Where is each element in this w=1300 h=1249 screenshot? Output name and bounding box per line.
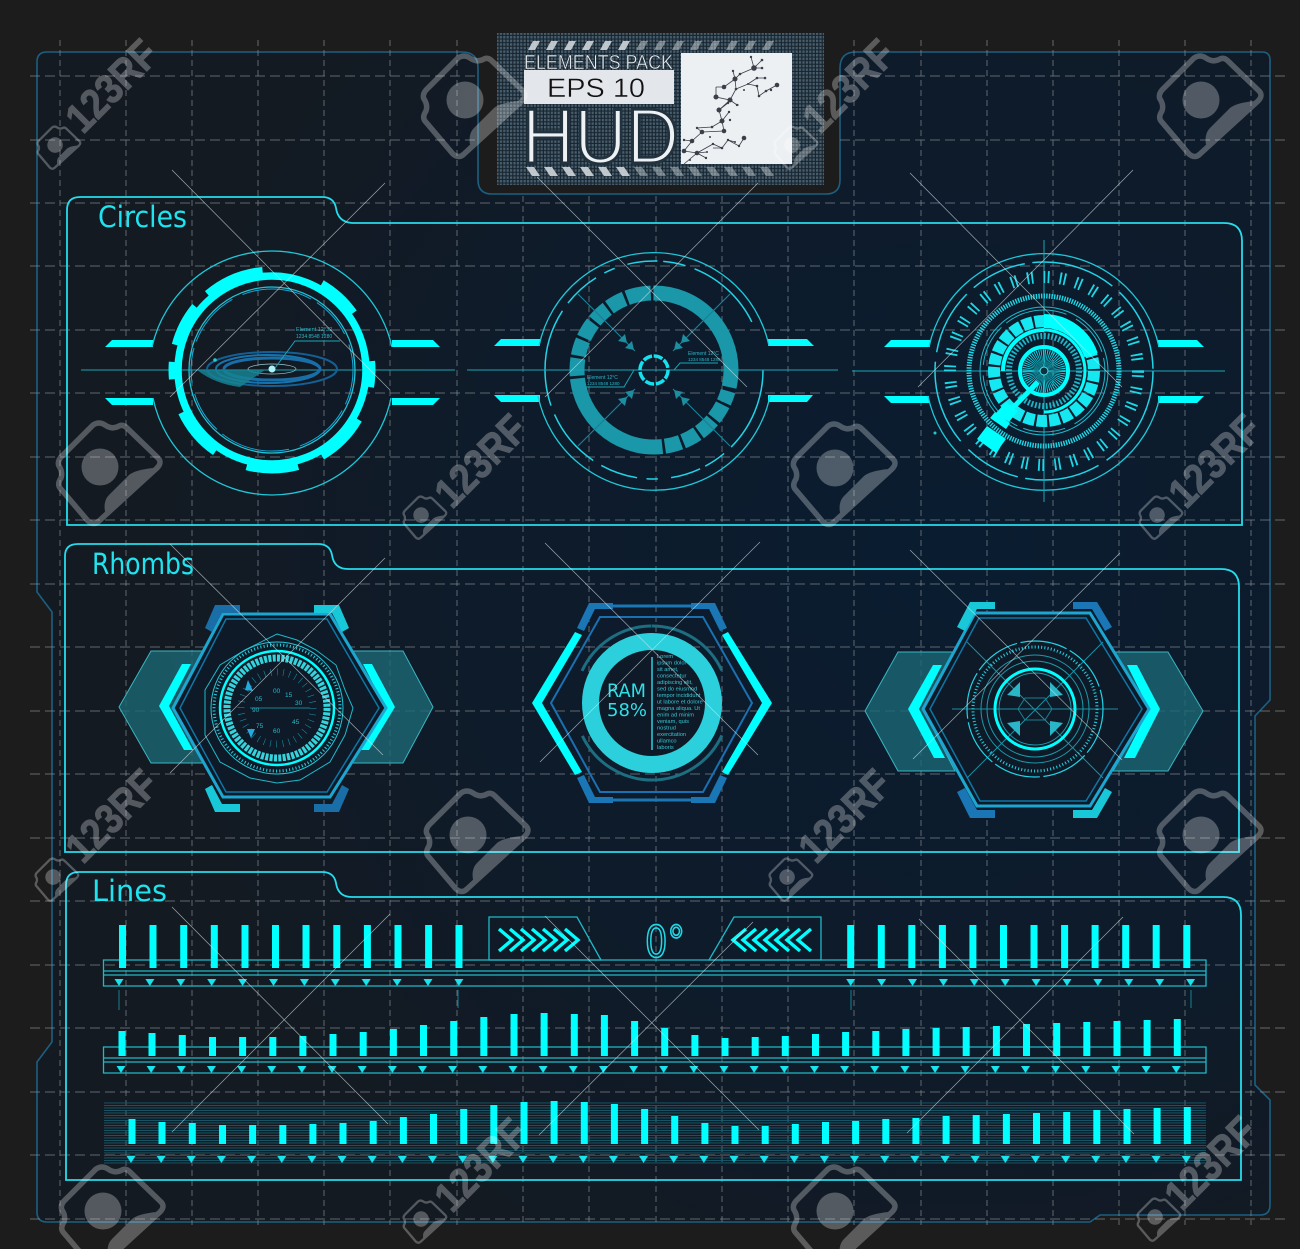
watermark logo text: 123RF bbox=[1159, 405, 1270, 516]
description text: ipsum dolor bbox=[657, 660, 687, 666]
badge: EPS 10 bbox=[524, 70, 674, 104]
compass numerals: 45 bbox=[292, 719, 300, 726]
description text: adipiscing elit, bbox=[657, 680, 693, 686]
description text: enim ad minim bbox=[657, 712, 694, 718]
description text: nostrud bbox=[657, 726, 676, 732]
heading: HUD: HUD bbox=[522, 92, 679, 180]
heading: lines: Lines bbox=[92, 874, 167, 908]
watermark logo text: 123RF bbox=[56, 760, 167, 871]
compass numerals bbox=[252, 688, 303, 735]
compass numerals: 60 bbox=[273, 728, 281, 735]
callout text: Element 12°C bbox=[688, 351, 719, 357]
description text: exercitation bbox=[657, 732, 686, 738]
degree readout: 0° bbox=[645, 917, 685, 968]
title plate: HUD elements pack bbox=[497, 33, 824, 185]
heading: circles: Circles bbox=[98, 200, 187, 234]
line scale 3: scanned bar levels bbox=[104, 1101, 1206, 1165]
compass numerals: 75 bbox=[256, 723, 264, 730]
watermark logo text: 123RF bbox=[789, 760, 900, 871]
description text: laboris bbox=[657, 745, 674, 751]
description text: consectetur bbox=[657, 674, 687, 680]
heading: rhombs: Rhombs bbox=[92, 547, 194, 581]
callout text: Element 12°C bbox=[587, 375, 618, 381]
watermark logo text: 123RF bbox=[425, 405, 536, 516]
watermark logo text: 123RF bbox=[56, 30, 167, 141]
callout text: 1234 8548 1280 bbox=[688, 357, 721, 362]
speed box: left chevrons bbox=[709, 917, 821, 960]
circle gauge 2: crosshair bbox=[467, 253, 838, 490]
description text: veniam, quis bbox=[657, 719, 689, 725]
callout text: 1234 8548 1280 bbox=[587, 381, 620, 386]
callout text: Element 12°32 bbox=[296, 327, 332, 333]
line scale 1: heading indicator bbox=[104, 917, 1206, 1010]
compass numerals: 30 bbox=[295, 700, 303, 707]
speed box: right chevrons bbox=[489, 917, 601, 960]
hazard stripes bbox=[526, 41, 774, 176]
circle gauge 1: orbit: 1234 8548 1280 bbox=[296, 334, 332, 340]
panel: lines bbox=[66, 872, 1241, 1180]
hexagon gauge 3: target bbox=[865, 602, 1203, 818]
compass numerals: 00 bbox=[273, 688, 281, 695]
hexagon gauge 1: compass bbox=[119, 605, 433, 812]
description text: ut labore et dolore bbox=[657, 700, 703, 706]
circle gauge 3: radial reactor bbox=[852, 240, 1225, 502]
description text: sit amet, bbox=[657, 667, 679, 673]
description text: sed do eiusmod bbox=[657, 686, 697, 692]
hexagon gauge 2: RAM bbox=[532, 603, 772, 803]
circle gauge 1: orbit bbox=[81, 251, 455, 495]
badge: EPS 10: EPS 10 bbox=[547, 73, 645, 103]
label: RAM: RAM bbox=[607, 680, 646, 702]
description text: Lorem bbox=[657, 654, 673, 660]
description text: ullamco bbox=[657, 738, 677, 744]
panel: rhombs bbox=[65, 544, 1239, 852]
molecule image bbox=[681, 53, 792, 164]
description text: magna aliqua. Ut bbox=[657, 706, 700, 712]
value: 58%: 58% bbox=[607, 700, 647, 721]
compass numerals: 15 bbox=[285, 692, 293, 699]
construction diagonals bbox=[170, 170, 1134, 1135]
watermark logo text: 123RF bbox=[1155, 1107, 1266, 1218]
watermark logo text: 123RF bbox=[425, 1109, 536, 1220]
watermark logo text: 123RF bbox=[793, 30, 904, 141]
watermark small eggs bbox=[36, 127, 1182, 1243]
description text bbox=[657, 654, 703, 751]
compass numerals: 90 bbox=[252, 707, 260, 714]
heading: elements pack: ELEMENTS PACK bbox=[524, 52, 674, 74]
panel: circles bbox=[67, 197, 1242, 525]
description text: tempor incididunt bbox=[657, 693, 701, 699]
line scale 2: bar levels bbox=[104, 1013, 1206, 1074]
compass numerals: 05 bbox=[255, 696, 263, 703]
